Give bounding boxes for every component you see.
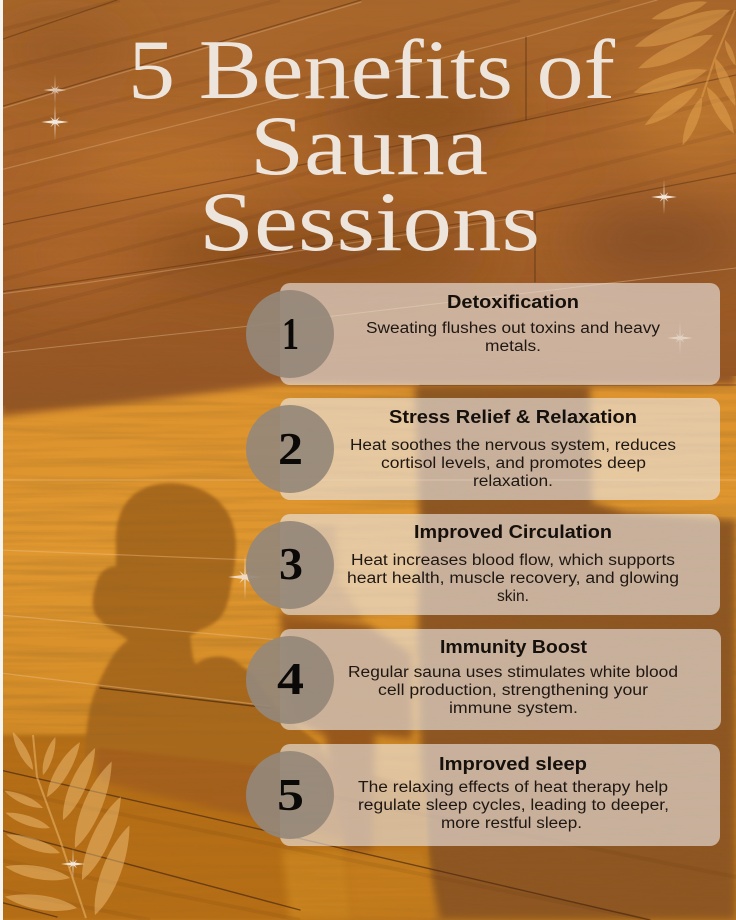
card 4 [280, 629, 721, 730]
number badge 5 [246, 751, 334, 839]
card 4 text: immune system. [449, 700, 578, 717]
card 5 heading: Improved sleep [439, 753, 587, 774]
card 2 text [350, 437, 676, 490]
number badge 4: 4 [277, 653, 304, 704]
card 3 text: heart health, muscle recovery, and glowing [347, 570, 679, 587]
lower wall shading [0, 735, 430, 920]
number badge 1 [246, 290, 334, 378]
card 5 text [358, 779, 669, 832]
card 4 text [348, 664, 678, 717]
card 3 heading: Improved Circulation [414, 521, 612, 542]
card 2 heading: Stress Relief & Relaxation [389, 406, 637, 427]
card 3 text [347, 552, 679, 605]
card 1 text: metals. [485, 338, 541, 355]
card 3 text: skin. [497, 588, 529, 605]
card 4 heading: Immunity Boost [440, 636, 587, 657]
card 5 text: more restful sleep. [441, 815, 582, 832]
card 1 [280, 283, 720, 385]
panel: improved sleep [246, 744, 720, 846]
palm leaf top right [631, 0, 736, 147]
title: Sauna [250, 99, 488, 193]
card 4 text: cell production, strengthening your [378, 682, 648, 699]
card 1 text: Sweating flushes out toxins and heavy [366, 320, 660, 337]
card 1 heading: Detoxification [447, 291, 579, 312]
panel: immunity boost [246, 629, 721, 730]
arm shadow [280, 612, 412, 850]
card 3 text: Heat increases blood flow, which supports [351, 552, 675, 569]
number badge 1: 1 [282, 308, 299, 359]
title [128, 23, 616, 269]
right figure shadow [415, 385, 736, 920]
number badge 3: 3 [279, 538, 303, 589]
panel: detoxification [246, 283, 720, 385]
panel: stress relief [246, 398, 720, 500]
number badge 5: 5 [277, 769, 304, 820]
girl shadow [85, 483, 322, 770]
number badge 3 [246, 521, 334, 609]
card 5 [280, 744, 720, 846]
number badge 4 [246, 636, 334, 724]
number badge 2 [246, 405, 334, 493]
title: Sessions [199, 175, 540, 269]
card 5 text: regulate sleep cycles, leading to deeper, [358, 797, 669, 814]
card 1 text [366, 320, 660, 355]
palm leaf bottom left [3, 730, 138, 918]
card 2 text: cortisol levels, and promotes deep [381, 455, 646, 472]
card 3 [280, 514, 720, 615]
panel: improved circulation [246, 514, 720, 615]
card 2 text: Heat soothes the nervous system, reduces [350, 437, 676, 454]
card 2 [280, 398, 720, 500]
sparkle decorations [41, 74, 677, 880]
number badge 2: 2 [278, 423, 303, 474]
title: 5 Benefits of [128, 23, 616, 117]
sparkle on card 1 [667, 320, 693, 356]
card 2 text: relaxation. [473, 473, 553, 490]
card 4 text: Regular sauna uses stimulates white blood [348, 664, 678, 681]
card 5 text: The relaxing effects of heat therapy help [358, 779, 668, 796]
